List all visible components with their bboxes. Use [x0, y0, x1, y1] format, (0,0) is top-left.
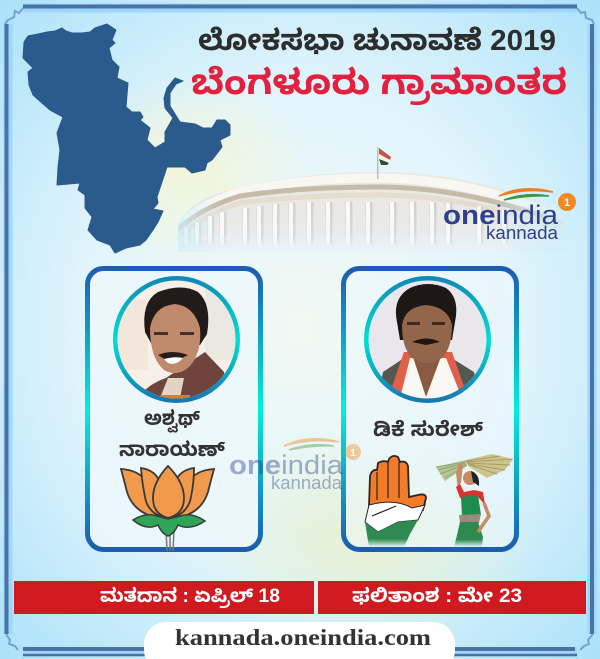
oneindia logo: [443, 189, 576, 243]
oneindia watermark: [229, 439, 361, 493]
icon: BJP lotus: [121, 466, 214, 551]
banner: polling date: [14, 581, 314, 614]
oneindia logo: 1: [564, 197, 570, 209]
banner: polling date: ಮತದಾನ : ಏಪ್ರಿಲ್ 18: [100, 586, 280, 608]
oneindia logo: kannada: [486, 223, 559, 243]
banner: result date: ಫಲಿತಾಂಶ : ಮೇ 23: [352, 586, 522, 607]
portrait: DK Suresh: [366, 278, 488, 400]
oneindia watermark: kannada: [271, 473, 343, 493]
oneindia watermark: oneindia: [229, 450, 344, 480]
icon: farmer woman with grass bundle: [436, 454, 513, 547]
parliament building: [178, 172, 566, 252]
portrait: Ashwath Narayan: [116, 278, 238, 400]
flag: [377, 147, 391, 179]
title: constituency name: ಬೆಂಗಳೂರು ಗ್ರಾಮಾಂತರ: [191, 63, 567, 106]
map of constituency: [23, 24, 230, 253]
title: election line: ಲೋಕಸಭಾ ಚುನಾವಣೆ 2019: [198, 25, 556, 57]
oneindia watermark: 1: [350, 448, 356, 459]
candidate surname: ನಾರಾಯಣ್: [119, 439, 225, 461]
banner: result date: [318, 581, 586, 614]
oneindia logo: oneindia: [443, 200, 559, 230]
website pill: kannada.oneindia.com: [175, 625, 431, 650]
candidate name: ಅಶ್ವಥ್: [144, 408, 200, 433]
panel: candidate left: [88, 268, 260, 551]
website pill: [144, 622, 455, 659]
candidate name: ಡಿಕೆ ಸುರೇಶ್: [373, 419, 484, 441]
icon: Congress hand: [365, 456, 426, 547]
panel: candidate right: [344, 268, 516, 550]
